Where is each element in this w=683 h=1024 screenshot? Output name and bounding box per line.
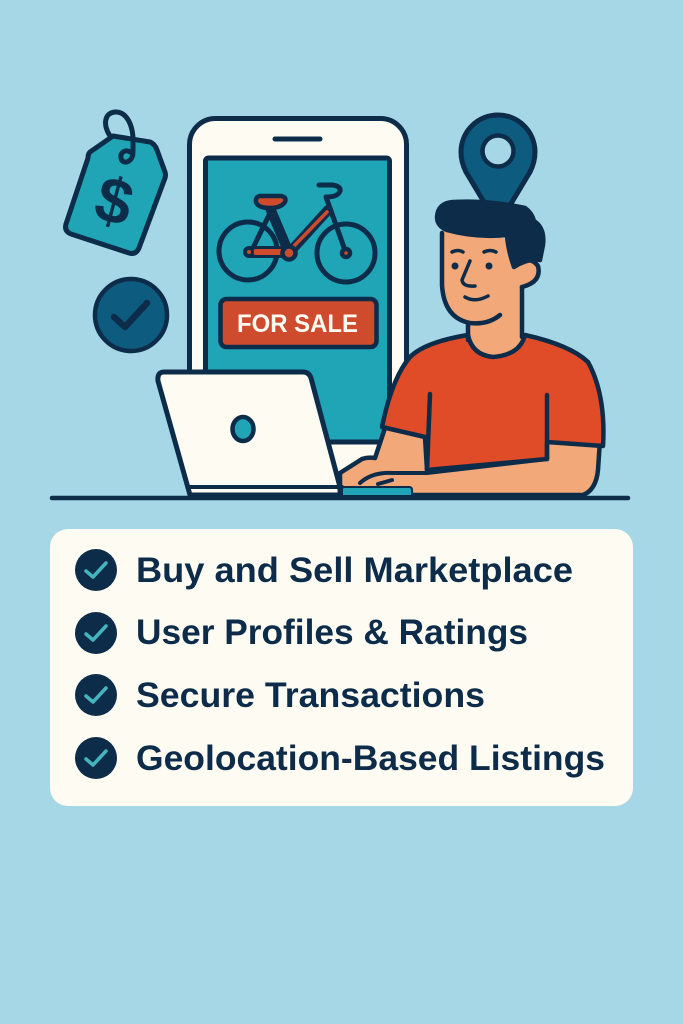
phone screen bbox=[206, 158, 390, 442]
ground line bbox=[52, 496, 628, 500]
icon: check bbox=[75, 674, 117, 716]
icon: location pin bbox=[461, 115, 535, 207]
icon: check bbox=[75, 612, 117, 654]
feature text: Geolocation-Based Listings bbox=[136, 739, 605, 778]
icon: check bbox=[75, 549, 117, 591]
for sale button bbox=[220, 299, 376, 347]
ear bbox=[516, 260, 539, 287]
phone bbox=[190, 118, 406, 494]
icon: check bbox=[75, 737, 117, 779]
face bbox=[442, 225, 522, 330]
for sale button: FOR SALE bbox=[237, 310, 358, 338]
neck bbox=[468, 285, 523, 360]
laptop bbox=[158, 372, 342, 495]
panel: feature list bbox=[50, 529, 633, 806]
person bbox=[340, 202, 603, 495]
trackpad bbox=[342, 487, 412, 496]
facial features bbox=[452, 250, 496, 300]
t-shirt bbox=[382, 335, 603, 470]
feature text: Buy and Sell Marketplace bbox=[136, 551, 573, 590]
arm and hand bbox=[340, 420, 600, 495]
icon: bicycle bbox=[219, 185, 375, 282]
feature text: Secure Transactions bbox=[136, 676, 485, 715]
icon: price tag: $ bbox=[88, 162, 141, 240]
feature text: User Profiles & Ratings bbox=[136, 613, 528, 652]
hair bbox=[437, 202, 543, 267]
icon: check badge bbox=[95, 279, 167, 351]
icon: price tag bbox=[66, 112, 166, 253]
